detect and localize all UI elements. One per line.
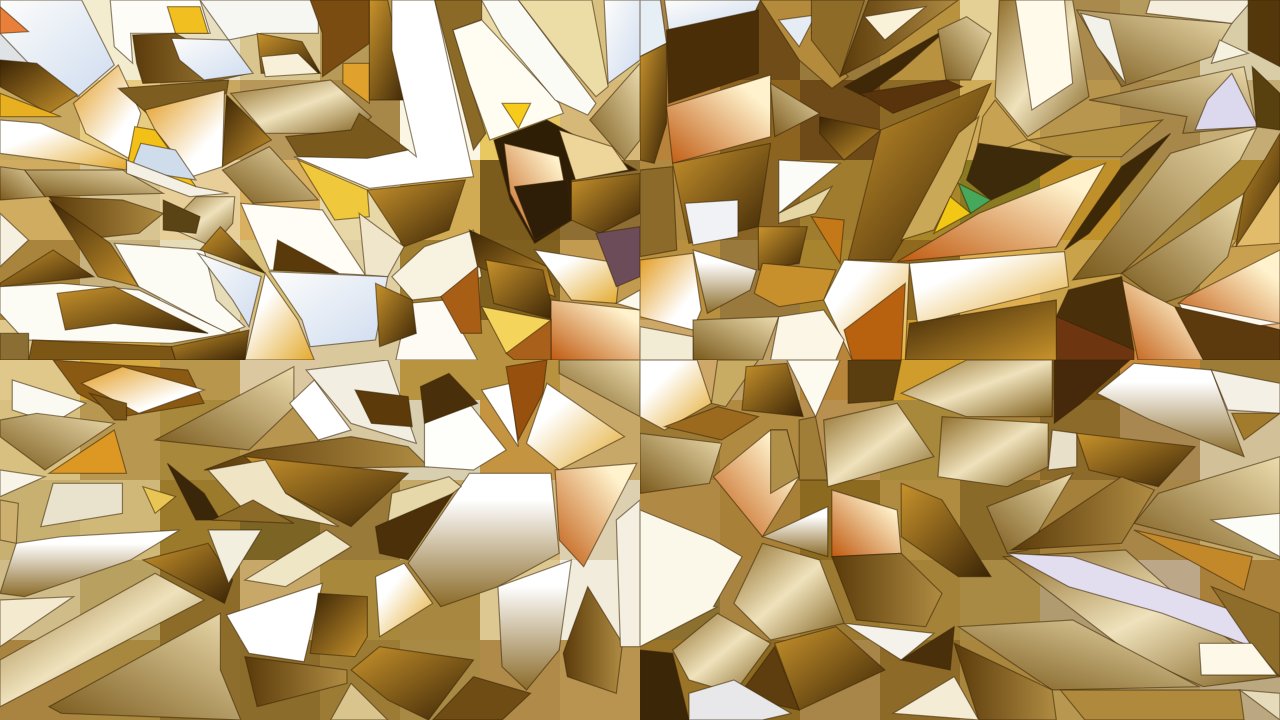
crystal facets: bottom-left quadrant [0,360,640,720]
crystal facets: bottom-right quadrant [640,360,1280,720]
crystal facets: top-right quadrant [640,0,1280,360]
crystal facets: top-left quadrant [0,0,640,360]
